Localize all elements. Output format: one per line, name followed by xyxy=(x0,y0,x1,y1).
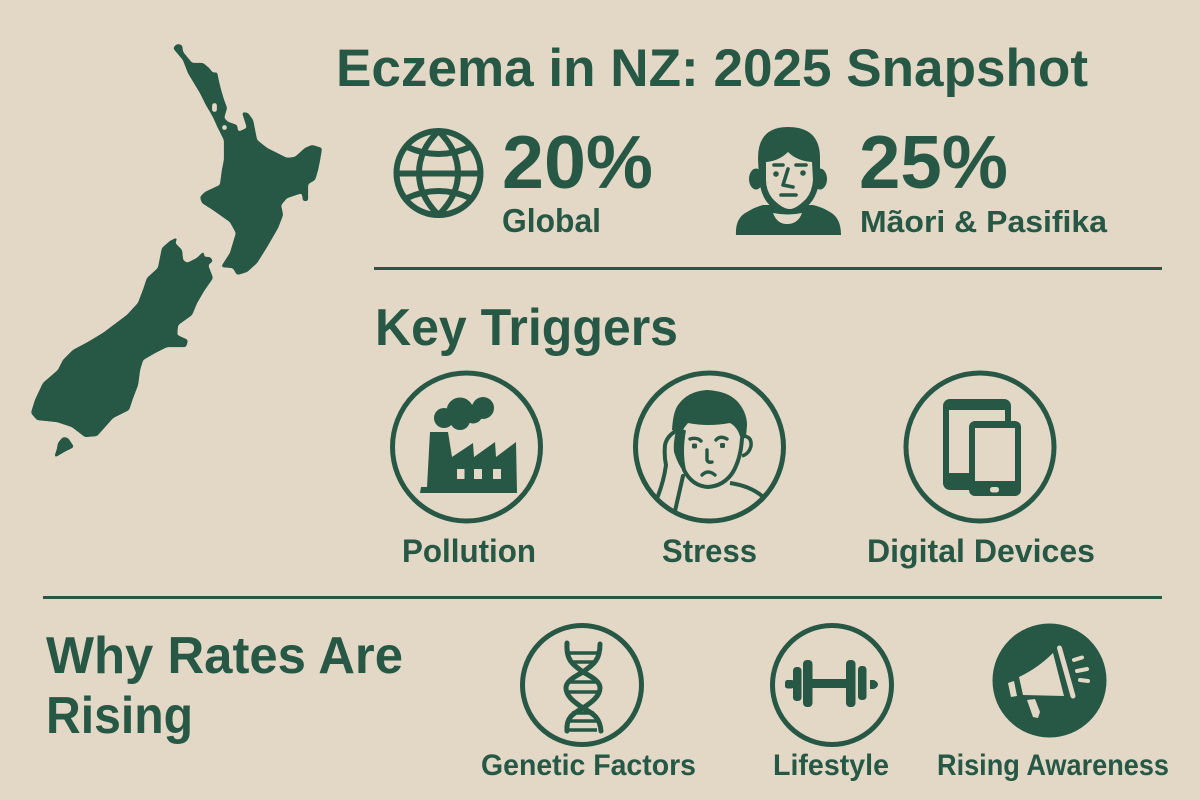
trigger: digital devices xyxy=(867,373,1095,569)
heading: Key Triggers: Key Triggers xyxy=(375,299,678,357)
trigger: stress xyxy=(636,373,784,569)
label: Stress: Stress xyxy=(662,533,757,569)
icon: megaphone xyxy=(992,624,1106,738)
trigger: pollution xyxy=(392,373,540,569)
factor: lifestyle xyxy=(772,626,892,782)
label: Lifestyle: Lifestyle xyxy=(773,749,889,782)
icon: person xyxy=(736,127,841,235)
icon: stressed face xyxy=(636,373,784,521)
factor: genetic xyxy=(481,626,696,782)
label: Genetic Factors: Genetic Factors xyxy=(481,749,696,782)
label: Pollution: Pollution xyxy=(402,533,536,569)
stat value: 25%: 25% xyxy=(859,120,1008,204)
icon: globe xyxy=(396,131,480,215)
icon: tablet and phone xyxy=(906,373,1054,521)
stat: Maori and Pasifika xyxy=(736,120,1108,239)
factor: rising awareness xyxy=(937,624,1169,782)
label: Rising Awareness: Rising Awareness xyxy=(937,749,1169,782)
stat label: Global: Global xyxy=(502,202,601,239)
title: Eczema in NZ: 2025 Snapshot xyxy=(336,39,1088,98)
stat value: 20%: 20% xyxy=(502,120,653,204)
map: New Zealand xyxy=(31,44,322,458)
icon: DNA helix xyxy=(522,626,642,744)
label: Digital Devices: Digital Devices xyxy=(867,533,1095,569)
heading: Why Rates Are Rising: Rising xyxy=(46,687,193,745)
heading: Why Rates Are Rising xyxy=(46,627,403,745)
stat label: Mãori & Pasifika: Mãori & Pasifika xyxy=(860,204,1108,239)
icon: dumbbell xyxy=(772,626,892,744)
heading: Why Rates Are Rising: Why Rates Are xyxy=(46,627,403,685)
stat: global xyxy=(396,120,653,239)
icon: factory xyxy=(392,373,540,521)
